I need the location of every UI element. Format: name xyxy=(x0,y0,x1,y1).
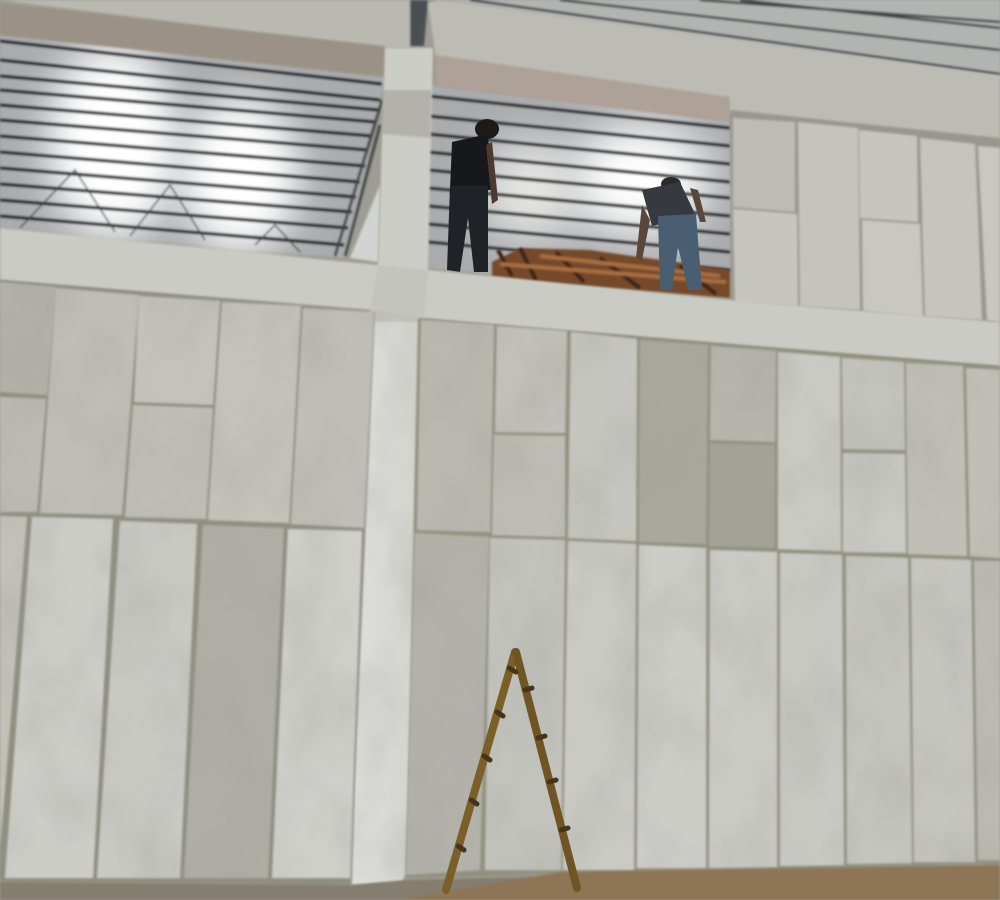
concrete mottling on lower walls xyxy=(24,334,974,876)
top beams xyxy=(0,0,1000,140)
centre column xyxy=(352,48,433,885)
left wall panels xyxy=(0,280,375,885)
worker bending xyxy=(636,177,706,290)
wood pile on ledge xyxy=(492,248,730,298)
worker standing xyxy=(447,119,499,272)
middle window with louvres xyxy=(428,85,730,298)
bamboo ladder xyxy=(446,652,577,890)
horizontal concrete beam xyxy=(0,228,1000,366)
roof upper right xyxy=(440,0,1000,80)
right wall panels xyxy=(406,318,1000,878)
upper right panels xyxy=(730,110,1000,325)
upper left window with louvres xyxy=(0,35,385,262)
floor xyxy=(0,865,1000,900)
